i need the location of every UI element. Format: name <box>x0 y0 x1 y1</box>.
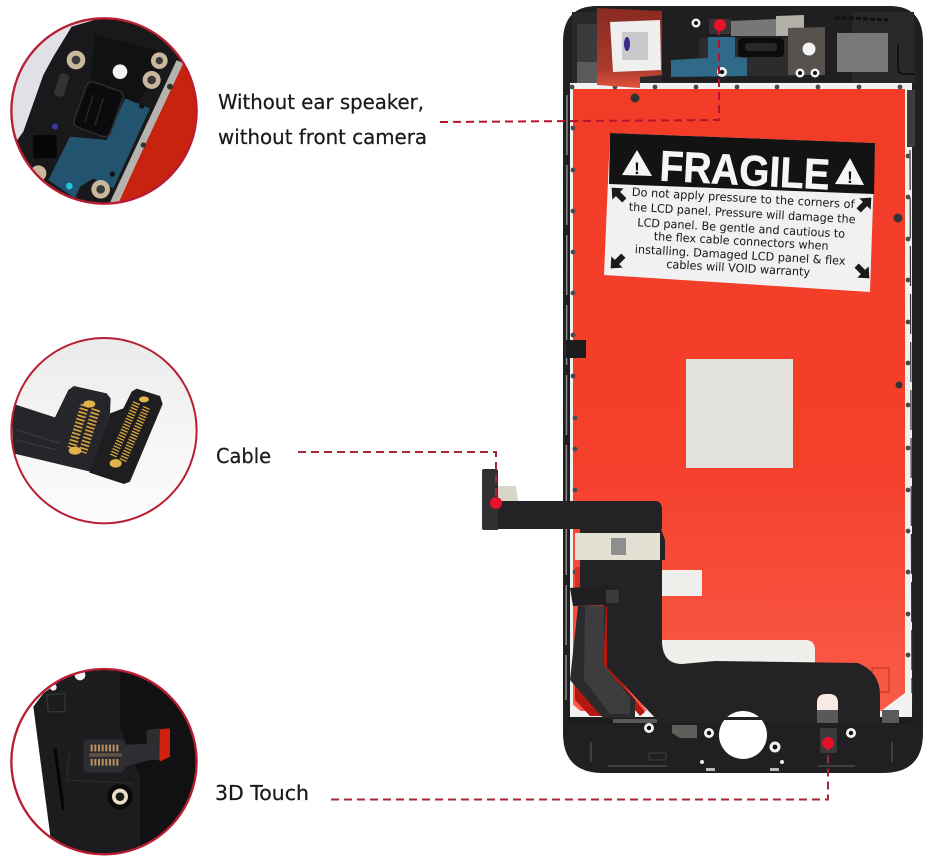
sticker warning text: LCD panel. Be gentle and cautious to <box>637 215 845 241</box>
leader line: 3D Touch <box>331 737 834 800</box>
sticker warning text: the flex cable connectors when <box>653 229 829 253</box>
label: without front camera: without front camera <box>218 125 427 149</box>
left side frame strip <box>563 83 586 723</box>
central grey square <box>686 359 793 468</box>
sticker warning text: installing. Damaged LCD panel & flex <box>634 242 846 268</box>
label: cable: Cable <box>216 444 271 468</box>
FRAGILE word: FRAGILE <box>659 143 831 199</box>
white border of panel <box>568 83 912 720</box>
flex cable tab extending left <box>482 469 662 530</box>
label: without ear speaker: Without ear speaker, <box>218 90 424 114</box>
sticker warning text <box>629 185 856 279</box>
sticker warning text: the LCD panel. Pressure will damage the <box>629 200 856 226</box>
panel edge dots <box>570 85 910 698</box>
sticker warning text: Do not apply pressure to the corners of <box>632 185 856 211</box>
warning triangle left <box>622 150 652 178</box>
white labels behind flex <box>650 570 815 668</box>
warning triangle right <box>835 158 864 187</box>
top bracket parts <box>671 15 914 78</box>
leader line: cable <box>298 452 502 509</box>
red tab next to main flex <box>575 567 585 590</box>
sticker warning text: cables will VOID warranty <box>666 257 811 279</box>
red strip beside the tail <box>603 605 645 716</box>
lower corners of panel <box>568 668 914 724</box>
warning triangle right: ! <box>847 168 853 187</box>
phone frame <box>563 6 923 773</box>
notch lower bracket <box>817 710 838 723</box>
sticker corner arrows <box>605 182 877 284</box>
label: 3D Touch: 3D Touch <box>215 781 309 805</box>
bottom bezel details <box>591 711 892 771</box>
top bracket area <box>572 12 914 84</box>
notch interior <box>817 694 838 711</box>
main flex cable body <box>580 529 880 723</box>
top-left translucent tape with QR label <box>597 8 662 88</box>
detail circle: 3D Touch connector <box>10 668 198 856</box>
beige QR label on flex <box>575 533 660 560</box>
phone screen assembly <box>563 6 923 773</box>
sticker black header <box>609 133 875 194</box>
FRAGILE sticker <box>604 133 877 292</box>
detail circle: cable connectors <box>10 337 198 524</box>
leader line: ear speaker <box>440 19 726 122</box>
warning triangle left: ! <box>634 159 640 178</box>
red back panel <box>573 89 905 711</box>
right side frame strip <box>907 83 923 723</box>
flex tail with red under-layer <box>570 585 635 718</box>
detail circle: ear speaker area <box>10 17 198 205</box>
